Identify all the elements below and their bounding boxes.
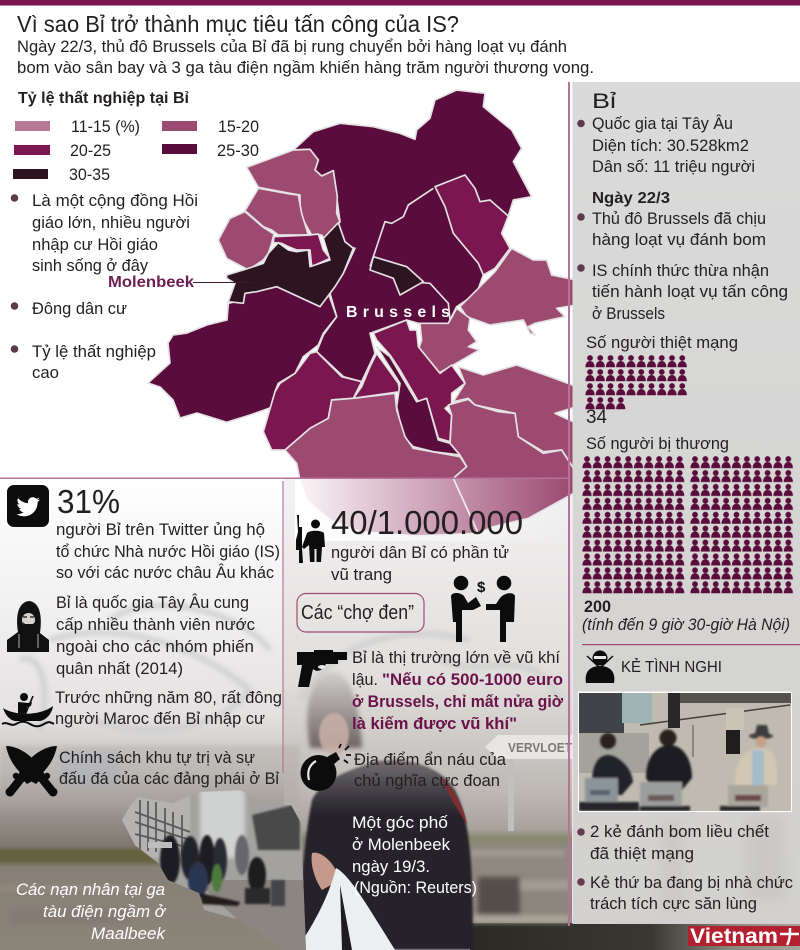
icon: ninja	[586, 650, 614, 683]
text: foreign fighters: quân nhất (2014)	[56, 659, 183, 678]
top bar	[0, 0, 800, 6]
caption: Maalbeek victims: tàu điện ngầm ở	[43, 902, 167, 921]
region: small south 20-25	[353, 353, 400, 398]
text: foreign fighters: cấp nhiều thành viên nước	[56, 615, 255, 634]
divider suspects	[582, 644, 800, 645]
text: two bombers dead: đã thiệt mạng	[590, 844, 694, 863]
caption: Molenbeek photo	[352, 813, 477, 897]
region: Molenbeek 30-35	[227, 223, 353, 307]
region: central south 20-25	[373, 320, 465, 442]
pictogram: deaths	[585, 333, 738, 428]
text: illegal weapons market: là kiếm được vũ khí"	[352, 715, 517, 733]
legend: Tỷ lệ thất nghiệp tại Bỉ	[18, 90, 190, 107]
text: political fighting	[59, 748, 279, 788]
pictogram: injured: 200	[584, 598, 611, 616]
intro text	[17, 38, 594, 77]
region: south-west 20-25	[263, 352, 362, 450]
region: south strip 25-30	[377, 347, 460, 455]
text: bombings	[577, 209, 766, 249]
text: hideout	[354, 750, 507, 790]
horizontal divider	[0, 478, 570, 479]
bullet: high unemployment: cao	[32, 363, 59, 382]
stat: 31%: 31%	[57, 483, 120, 520]
pictogram: deaths: 34	[586, 407, 607, 428]
text: country facts: Dân số: 11 triệu người	[592, 157, 755, 176]
icon: pistol	[297, 650, 347, 687]
caption: Maalbeek victims: Các nạn nhân tại ga	[16, 880, 165, 899]
region: inner boundaries 25-30	[370, 188, 450, 320]
pictogram: injured	[582, 434, 794, 634]
background photo: Molenbeek street: VERVLOET	[508, 740, 572, 755]
icon: militant	[7, 601, 49, 652]
bullet: high unemployment: Tỷ lệ thất nghiệp	[32, 342, 156, 361]
stat: 31%	[56, 483, 280, 582]
pictogram: deaths: Số người thiệt mạng	[586, 333, 738, 352]
text: two bombers dead: 2 kẻ đánh bom liều chết	[590, 822, 769, 841]
region: south-east upper 15-20	[453, 365, 577, 473]
stat: 40 per million: 40/1.000.000	[331, 504, 523, 541]
region: far west 15-20	[218, 212, 274, 270]
text: country facts: Diện tích: 30.528km2	[592, 136, 749, 155]
region: east 15-20	[460, 248, 577, 335]
region: north-west 15-20	[247, 149, 340, 240]
text: Moroccan immigration: người Maroc đến Bỉ nhập cư	[55, 709, 265, 728]
bullet: large Muslim community: nhập cư Hồi giáo	[32, 235, 158, 254]
text: country facts: Quốc gia tại Tây Âu	[592, 114, 733, 133]
label: Molenbeek with leader line: Molenbeek	[108, 274, 194, 291]
stat: 31%: so với các nước châu Âu khác	[56, 563, 274, 582]
text: political fighting: đấu đá của các đảng phái ở Bỉ	[59, 769, 279, 788]
icon: dealing	[451, 576, 515, 642]
bullet: large Muslim community: giáo lớn, nhiều người	[32, 213, 190, 232]
title: Vì sao Bỉ trở thành mục tiêu tấn công của IS?	[17, 11, 459, 37]
intro text: Ngày 22/3, thủ đô Brussels của Bỉ đã bị rung chuyển bởi hàng loạt vụ đánh	[17, 38, 567, 56]
stat: 40 per million: vũ trang	[331, 565, 392, 584]
text: two bombers dead	[577, 822, 769, 863]
heading: date: Ngày 22/3	[592, 190, 670, 207]
stat: 31%: người Bỉ trên Twitter ủng hộ	[56, 520, 265, 539]
region: small 20-25	[273, 234, 330, 267]
region: north-east 20-25	[435, 175, 510, 275]
text: hideout: Địa điểm ẩn náu của	[354, 750, 507, 769]
background photo: Molenbeek street	[0, 478, 800, 950]
text: illegal weapons market	[352, 648, 563, 733]
bullet: large Muslim community	[11, 191, 198, 275]
text: third suspect hunted: Kẻ thứ ba đang bị nhà chức	[590, 873, 793, 892]
icon: dealing: $	[477, 579, 486, 596]
text: third suspect hunted: trách tích cực săn lùng	[590, 894, 757, 913]
legend: 15-20	[218, 117, 259, 136]
caption: Molenbeek photo: ngày 19/3.	[352, 857, 430, 876]
legend: 11-15 (%)	[71, 117, 140, 136]
text: illegal weapons market: Bỉ là thị trường lớn về vũ khí	[352, 648, 560, 667]
legend: 30-35	[69, 165, 110, 184]
intro text: bom vào sân bay và 3 ga tàu điện ngầm khiến hàng trăm người thương vong.	[17, 59, 594, 77]
text: political fighting: Chính sách khu tự trị và sự	[59, 748, 255, 767]
text: foreign fighters: ngoài cho các nhóm phiến	[56, 637, 254, 656]
background photo: woman in black jacket	[296, 672, 473, 950]
label: Brussels: Brussels	[346, 304, 450, 321]
icon: bomb	[300, 744, 351, 791]
callout: black markets: Các “chợ đen”	[301, 602, 414, 624]
text: Moroccan immigration: Trước những năm 80, rất đông	[55, 688, 282, 707]
pictogram: injured: (tính đến 9 giờ 30-giờ Hà Nội)	[582, 615, 790, 634]
text: Moroccan immigration	[55, 688, 282, 728]
legend: 25-30	[217, 141, 259, 160]
region: west 25-30	[148, 287, 337, 422]
text: country facts	[577, 114, 755, 176]
text: hideout: chủ nghĩa cực đoan	[354, 771, 500, 790]
text: IS claim: tiến hành loạt vụ tấn công	[592, 282, 788, 301]
map of Brussels unemployment	[148, 90, 577, 536]
pictogram: injured: Số người bị thương	[586, 434, 729, 453]
legend	[13, 90, 259, 184]
caption: Molenbeek photo: Một góc phố	[352, 813, 449, 832]
stat: 40 per million	[331, 504, 523, 584]
text: third suspect hunted	[577, 873, 793, 913]
text: foreign fighters: Bỉ là quốc gia Tây Âu cung	[56, 593, 249, 612]
stat: 31%: tổ chức Nhà nước Hồi giáo (IS)	[56, 542, 280, 561]
region: central 30-35	[370, 257, 423, 295]
map bottom fade	[295, 479, 572, 541]
region: west-north-west 15-20	[245, 188, 308, 235]
heading: suspects: KẺ TÌNH NGHI	[621, 657, 722, 676]
region: south-east lower 15-20	[448, 399, 577, 533]
text: illegal weapons market: ở Brussels, chỉ mất nửa giờ	[352, 693, 563, 711]
logo: Vietnam+: Vietnam	[690, 925, 778, 948]
background photo: victims at Maalbeek station	[120, 788, 310, 950]
heading: Bỉ: Bỉ	[592, 90, 616, 113]
caption: Molenbeek photo: ở Molenbeek	[352, 835, 450, 854]
text: illegal weapons market: lậu.	[352, 670, 378, 689]
icon: crossed swords	[6, 746, 58, 796]
legend: 20-25	[70, 141, 111, 160]
text: bombings: hàng loạt vụ đánh bom	[592, 230, 766, 249]
callout: black markets	[297, 594, 424, 632]
stat: 40 per million: người dân Bỉ có phần tử	[331, 543, 509, 562]
caption: Maalbeek victims: Maalbeek	[91, 924, 166, 943]
vertical divider left	[282, 481, 284, 773]
bullet: large Muslim community: sinh sống ở đây	[32, 256, 148, 275]
caption: Maalbeek victims	[16, 880, 167, 943]
bullet: densely populated: Đông dân cư	[32, 299, 127, 318]
text: bombings: Thủ đô Brussels đã chịu	[592, 209, 766, 228]
photo: three suspects	[578, 692, 792, 812]
icon: boat	[2, 693, 54, 726]
text: illegal weapons market: "Nếu có 500-1000 euro	[382, 671, 563, 689]
bullet: large Muslim community: Là một cộng đồng Hồi	[32, 191, 198, 210]
icon: armed person	[296, 515, 325, 563]
icon: twitter	[7, 485, 49, 527]
panel: Belgium facts	[568, 82, 800, 926]
text: IS claim: IS chính thức thừa nhận	[592, 261, 769, 280]
text: foreign fighters	[56, 593, 255, 678]
text: IS claim	[577, 261, 788, 323]
bullet: high unemployment	[11, 342, 156, 382]
region: north and centre 25-30	[293, 90, 532, 382]
region: south 15-20	[285, 393, 478, 536]
caption: Molenbeek photo: (Nguồn: Reuters)	[354, 878, 477, 897]
region: south-east small 15-20	[418, 308, 479, 373]
text: IS claim: ở Brussels	[592, 304, 665, 323]
